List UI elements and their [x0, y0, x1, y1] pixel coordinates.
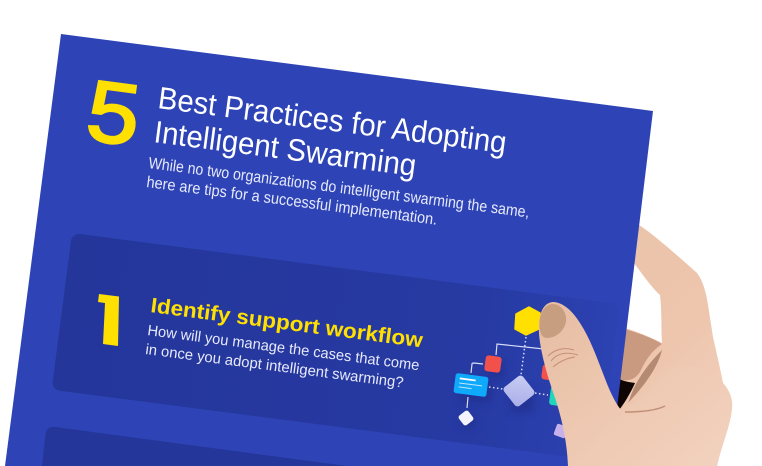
hand behind the page [590, 222, 732, 466]
hand thumb in front of the page [539, 302, 732, 466]
icon: teal square [549, 386, 571, 407]
panel: step 1 card [52, 233, 619, 461]
icon: second red square [541, 364, 558, 381]
step description: in once you adopt intelligent swarming? [144, 341, 405, 391]
panel: infographic page [5, 34, 653, 466]
icon: red square [484, 355, 502, 373]
icon: purple diamond [553, 423, 569, 439]
icon: yellow hexagon [515, 307, 540, 335]
icon: lavender diamond [502, 374, 536, 408]
icon shadows [459, 362, 534, 428]
step heading: Identify support workflow [149, 294, 425, 352]
connector lines [467, 337, 548, 408]
icon: white diamond [458, 410, 474, 426]
subtitle: While no two organizations do intelligent swarming the same, [147, 155, 530, 221]
thumbnail [539, 304, 566, 338]
subtitle: here are tips for a successful implementation. [145, 174, 438, 229]
title: Best Practices for Adopting [156, 80, 509, 160]
workflow diagram [453, 307, 571, 439]
panel: step 2 card [42, 427, 347, 466]
title: Intelligent Swarming [152, 114, 418, 183]
step description: How will you manage the cases that come [146, 322, 420, 374]
step number 1 [98, 294, 119, 346]
icon: blue card [453, 373, 489, 397]
big number 5: 5 [82, 63, 145, 165]
